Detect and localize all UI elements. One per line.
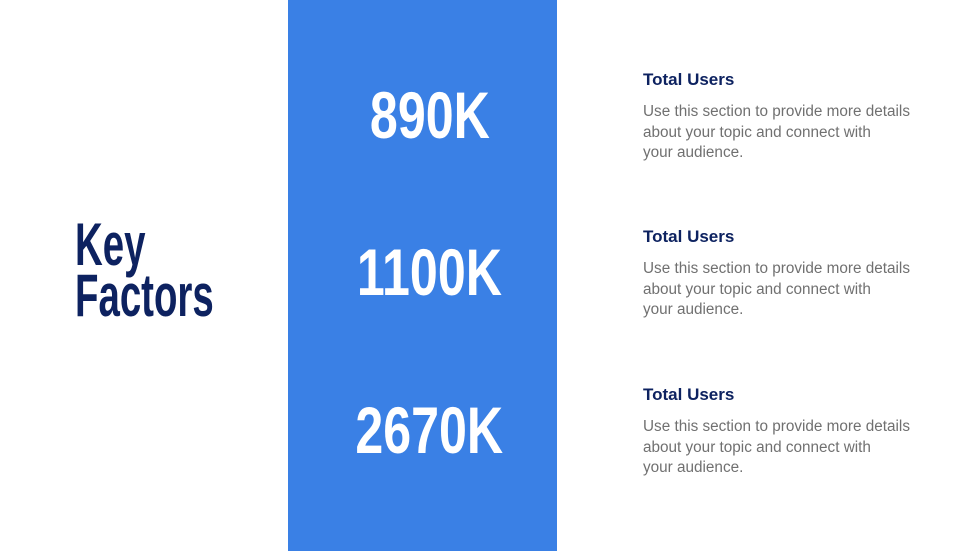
text block 1: Use this section to provide more details [643, 103, 910, 120]
text block 1: about your topic and connect with [643, 124, 871, 140]
text block 3: about your topic and connect with [643, 438, 871, 456]
number 890K: 890K [370, 78, 489, 152]
title: Key [75, 211, 145, 278]
panel: blue column [288, 0, 557, 551]
title [75, 211, 214, 329]
number 2670K: 2670K [356, 393, 503, 467]
text block 2 [643, 227, 910, 318]
text block 2: Use this section to provide more details [643, 260, 910, 277]
number 1100K: 1100K [357, 235, 502, 309]
text block 2: about your topic and connect with [643, 280, 871, 298]
text block 1: Total Users [643, 70, 734, 89]
text block 2: Total Users [643, 227, 734, 246]
text block 1 [643, 70, 910, 161]
text block 3 [643, 385, 910, 476]
text block 1: your audience. [643, 144, 743, 161]
title: Factors [75, 262, 214, 329]
text block 2: your audience. [643, 301, 743, 318]
text block 3: Use this section to provide more details [643, 418, 910, 435]
text block 3: your audience. [643, 459, 743, 476]
text block 3: Total Users [643, 385, 734, 404]
